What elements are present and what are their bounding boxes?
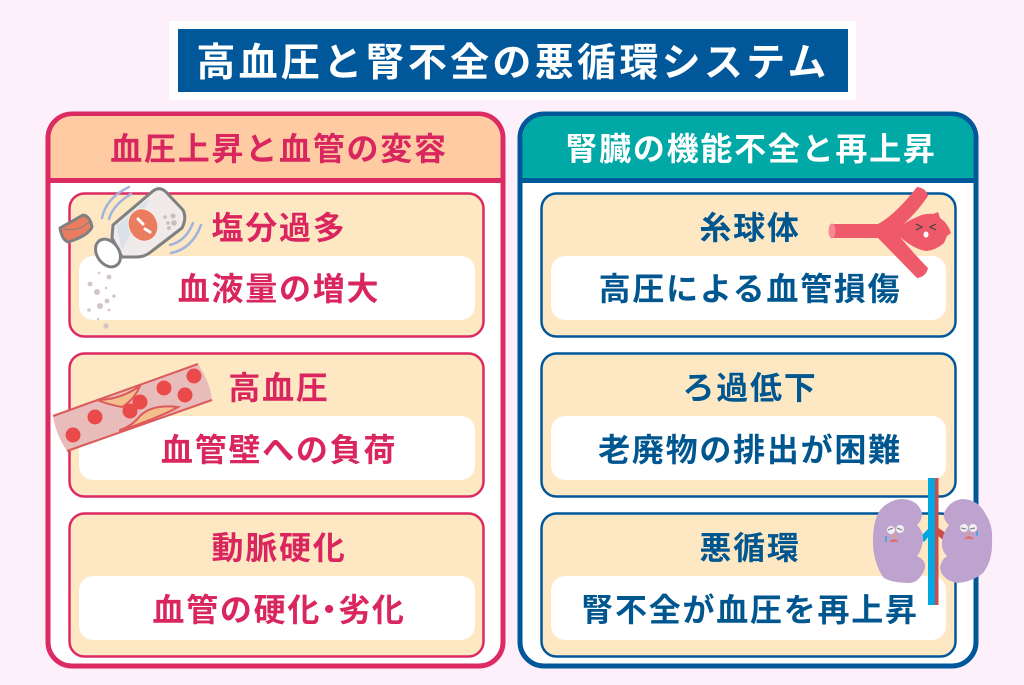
title: 高血圧と腎不全の悪循環システム <box>196 42 830 85</box>
card: glomerulus: 糸球体 <box>699 210 801 246</box>
panel heading: left <box>48 116 503 183</box>
card: salt excess: 血液量の増大 <box>178 271 380 307</box>
card: vicious cycle: 悪循環 <box>699 530 801 566</box>
card: hypertension: 血管壁への負荷 <box>161 432 397 468</box>
card: filtration decline: ろ過低下 <box>682 370 818 406</box>
panel heading: right: 腎臓の機能不全と再上昇 <box>565 131 937 167</box>
card: filtration decline: 老廃物の排出が困難 <box>598 432 902 468</box>
card: glomerulus <box>542 194 956 336</box>
card: arteriosclerosis: 動脈硬化 <box>211 530 347 566</box>
panel: kidney dysfunction and renewed rise <box>520 114 976 666</box>
icon: kidneys with vessels <box>873 478 992 605</box>
icon: salt shaker <box>60 187 201 329</box>
icon: blood vessel with plaque <box>53 364 212 451</box>
card: glomerulus: 高圧による血管損傷 <box>599 271 901 307</box>
card: salt excess <box>70 194 484 336</box>
icon: glomerulus <box>828 187 951 278</box>
card: filtration decline <box>542 354 956 496</box>
panel: blood pressure rise and vascular change <box>48 114 503 666</box>
card: hypertension: 高血圧 <box>228 370 330 406</box>
title <box>169 21 856 100</box>
card: arteriosclerosis <box>70 514 484 656</box>
card: hypertension <box>70 354 484 496</box>
card: arteriosclerosis: 血管の硬化・劣化 <box>152 592 406 628</box>
panel heading: right <box>520 116 976 183</box>
card: vicious cycle <box>542 514 956 656</box>
card: vicious cycle: 腎不全が血圧を再上昇 <box>581 592 919 628</box>
card: salt excess: 塩分過多 <box>211 210 347 246</box>
panel heading: left: 血圧上昇と血管の変容 <box>110 131 448 167</box>
